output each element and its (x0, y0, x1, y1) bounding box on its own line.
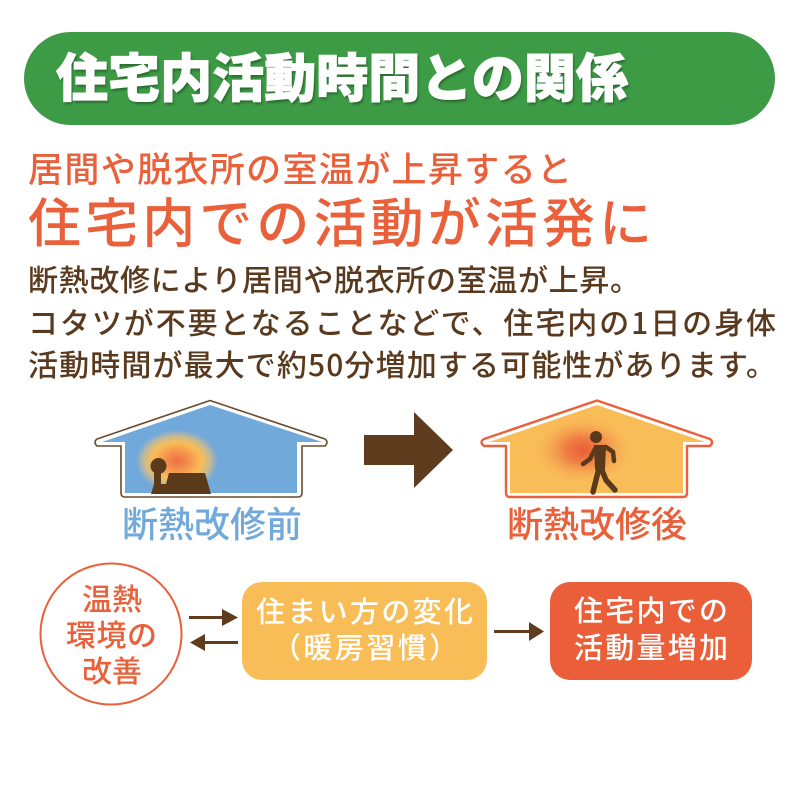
box: change in lifestyle: （暖房習慣） (272, 625, 458, 667)
circle: thermal environment improvement (40, 564, 182, 704)
icon: person at kotatsu (150, 458, 211, 494)
title banner: 住宅内活動時間との関係 (58, 40, 630, 114)
box: change in lifestyle (242, 582, 487, 680)
arrow: habits to activity (494, 622, 544, 641)
circle: thermal environment improvement: 改善 (82, 647, 142, 691)
arrow: before to after (364, 412, 453, 488)
arrow: right, circle to habits (189, 609, 238, 626)
label: before renovation: 断熱改修前 (122, 496, 302, 548)
heat glow: walking person (543, 422, 623, 478)
title banner: 住宅内活動時間との関係 (56, 37, 628, 112)
heat glow: kotatsu (137, 430, 217, 486)
arrow: left, habits to circle (190, 634, 238, 651)
box: increased activity (550, 582, 752, 680)
circle: thermal environment improvement: 温熱 (82, 575, 142, 619)
subheading: 居間や脱衣所の室温が上昇すると (28, 142, 572, 193)
body text: 断熱改修により居間や脱衣所の室温が上昇。 (28, 256, 640, 300)
title banner (24, 32, 775, 125)
body text: 活動時間が最大で約50分増加する可能性があります。 (28, 341, 776, 385)
icon: walking person (583, 431, 615, 492)
label: after renovation: 断熱改修後 (507, 496, 687, 548)
box: increased activity: 活動量増加 (574, 625, 728, 667)
house: before renovation (95, 400, 327, 497)
main heading: 住宅内での活動が活発に (28, 182, 652, 258)
circle: thermal environment improvement: 環境の (66, 611, 157, 655)
body text (28, 256, 776, 385)
box: change in lifestyle: 住まい方の変化 (256, 589, 473, 631)
body text: コタツが不要となることなどで、住宅内の1日の身体 (28, 299, 776, 343)
box: increased activity: 住宅内での (574, 588, 728, 630)
house: after renovation (482, 400, 712, 497)
